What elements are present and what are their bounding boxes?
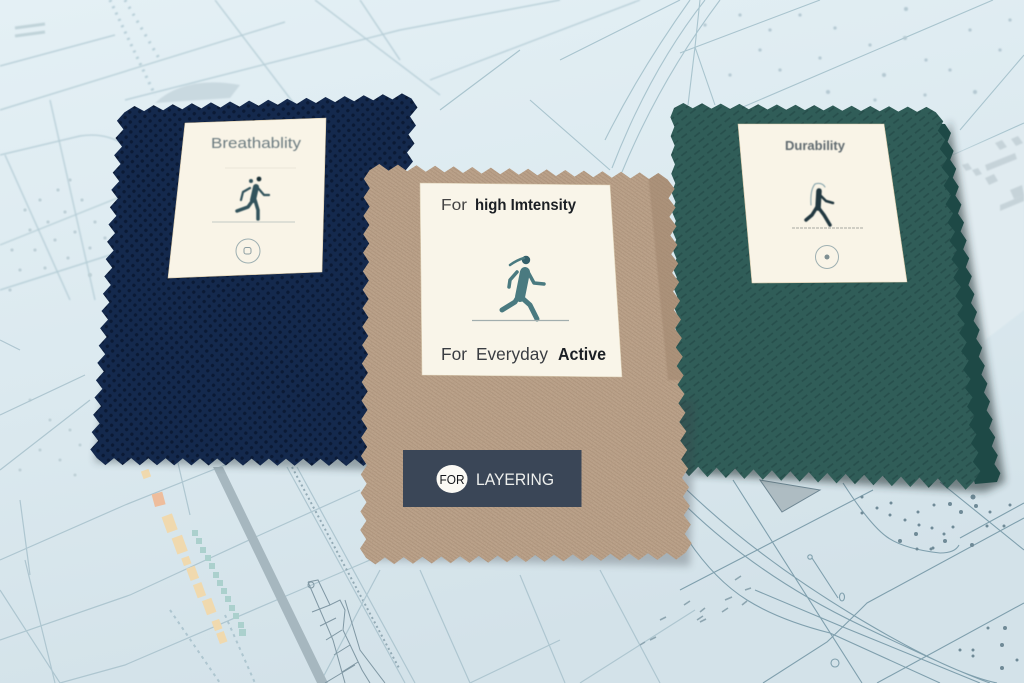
- map lines, upper left: [0, 0, 640, 300]
- tan swatch shadow: [372, 400, 695, 566]
- ground line: [472, 320, 569, 322]
- table sheet, right edge: [950, 125, 1024, 340]
- heading: Durability: Durability: [785, 139, 845, 153]
- ground line: [212, 221, 295, 223]
- text: For Everyday Active: Active: [558, 344, 606, 364]
- building plan drawing: [308, 580, 385, 683]
- lower-right dot field: [640, 494, 1018, 670]
- teal marker column: [192, 530, 246, 636]
- map dot field, top right: [703, 7, 1012, 102]
- map lines, lower left: [0, 340, 695, 683]
- lower-right road curves: [680, 480, 1024, 683]
- card: activity use: [420, 183, 622, 377]
- green swatch back layer: [930, 123, 1000, 484]
- badge: FOR: FOR: [440, 472, 464, 487]
- map dot field, left: [8, 178, 107, 476]
- heading: Breathablity: Breathablity: [211, 136, 302, 152]
- map fan lines, top centre: [440, 0, 1024, 172]
- card: durability: [738, 124, 907, 283]
- card: breathability: [168, 118, 326, 278]
- caption micro line: [792, 227, 863, 229]
- panel: tan swatch (For Layering): [350, 155, 700, 570]
- orange marker column: [141, 469, 227, 644]
- icon: walking figure: [806, 183, 833, 225]
- panel: navy swatch (Breathability): [90, 93, 418, 470]
- text: For high Imtensity: For: [441, 197, 467, 214]
- navy swatch cloth: [90, 93, 418, 466]
- icon: running figure: [502, 256, 544, 319]
- text: For Everyday Active: Everyday: [476, 344, 548, 364]
- fold on right side: [648, 173, 684, 380]
- text: For high Imtensity: high Imtensity: [475, 197, 576, 214]
- label bar: for layering: [403, 450, 582, 507]
- tan swatch cloth: [350, 155, 700, 570]
- divider above figure: [225, 167, 296, 169]
- hatched map block: [760, 480, 820, 512]
- panel: green swatch (Durability): [670, 103, 1005, 492]
- text: For Everyday Active: For: [441, 344, 467, 364]
- grey road band: [213, 467, 328, 683]
- icon: running figure: [237, 177, 269, 219]
- icon: circle badge: [236, 239, 260, 263]
- green swatch shadow: [690, 120, 1005, 492]
- green swatch cloth: [670, 103, 980, 490]
- icon: circle badge: [816, 246, 838, 268]
- text: LAYERING: LAYERING: [476, 470, 554, 489]
- badge: FOR: [436, 465, 468, 493]
- navy swatch shadow: [95, 200, 400, 470]
